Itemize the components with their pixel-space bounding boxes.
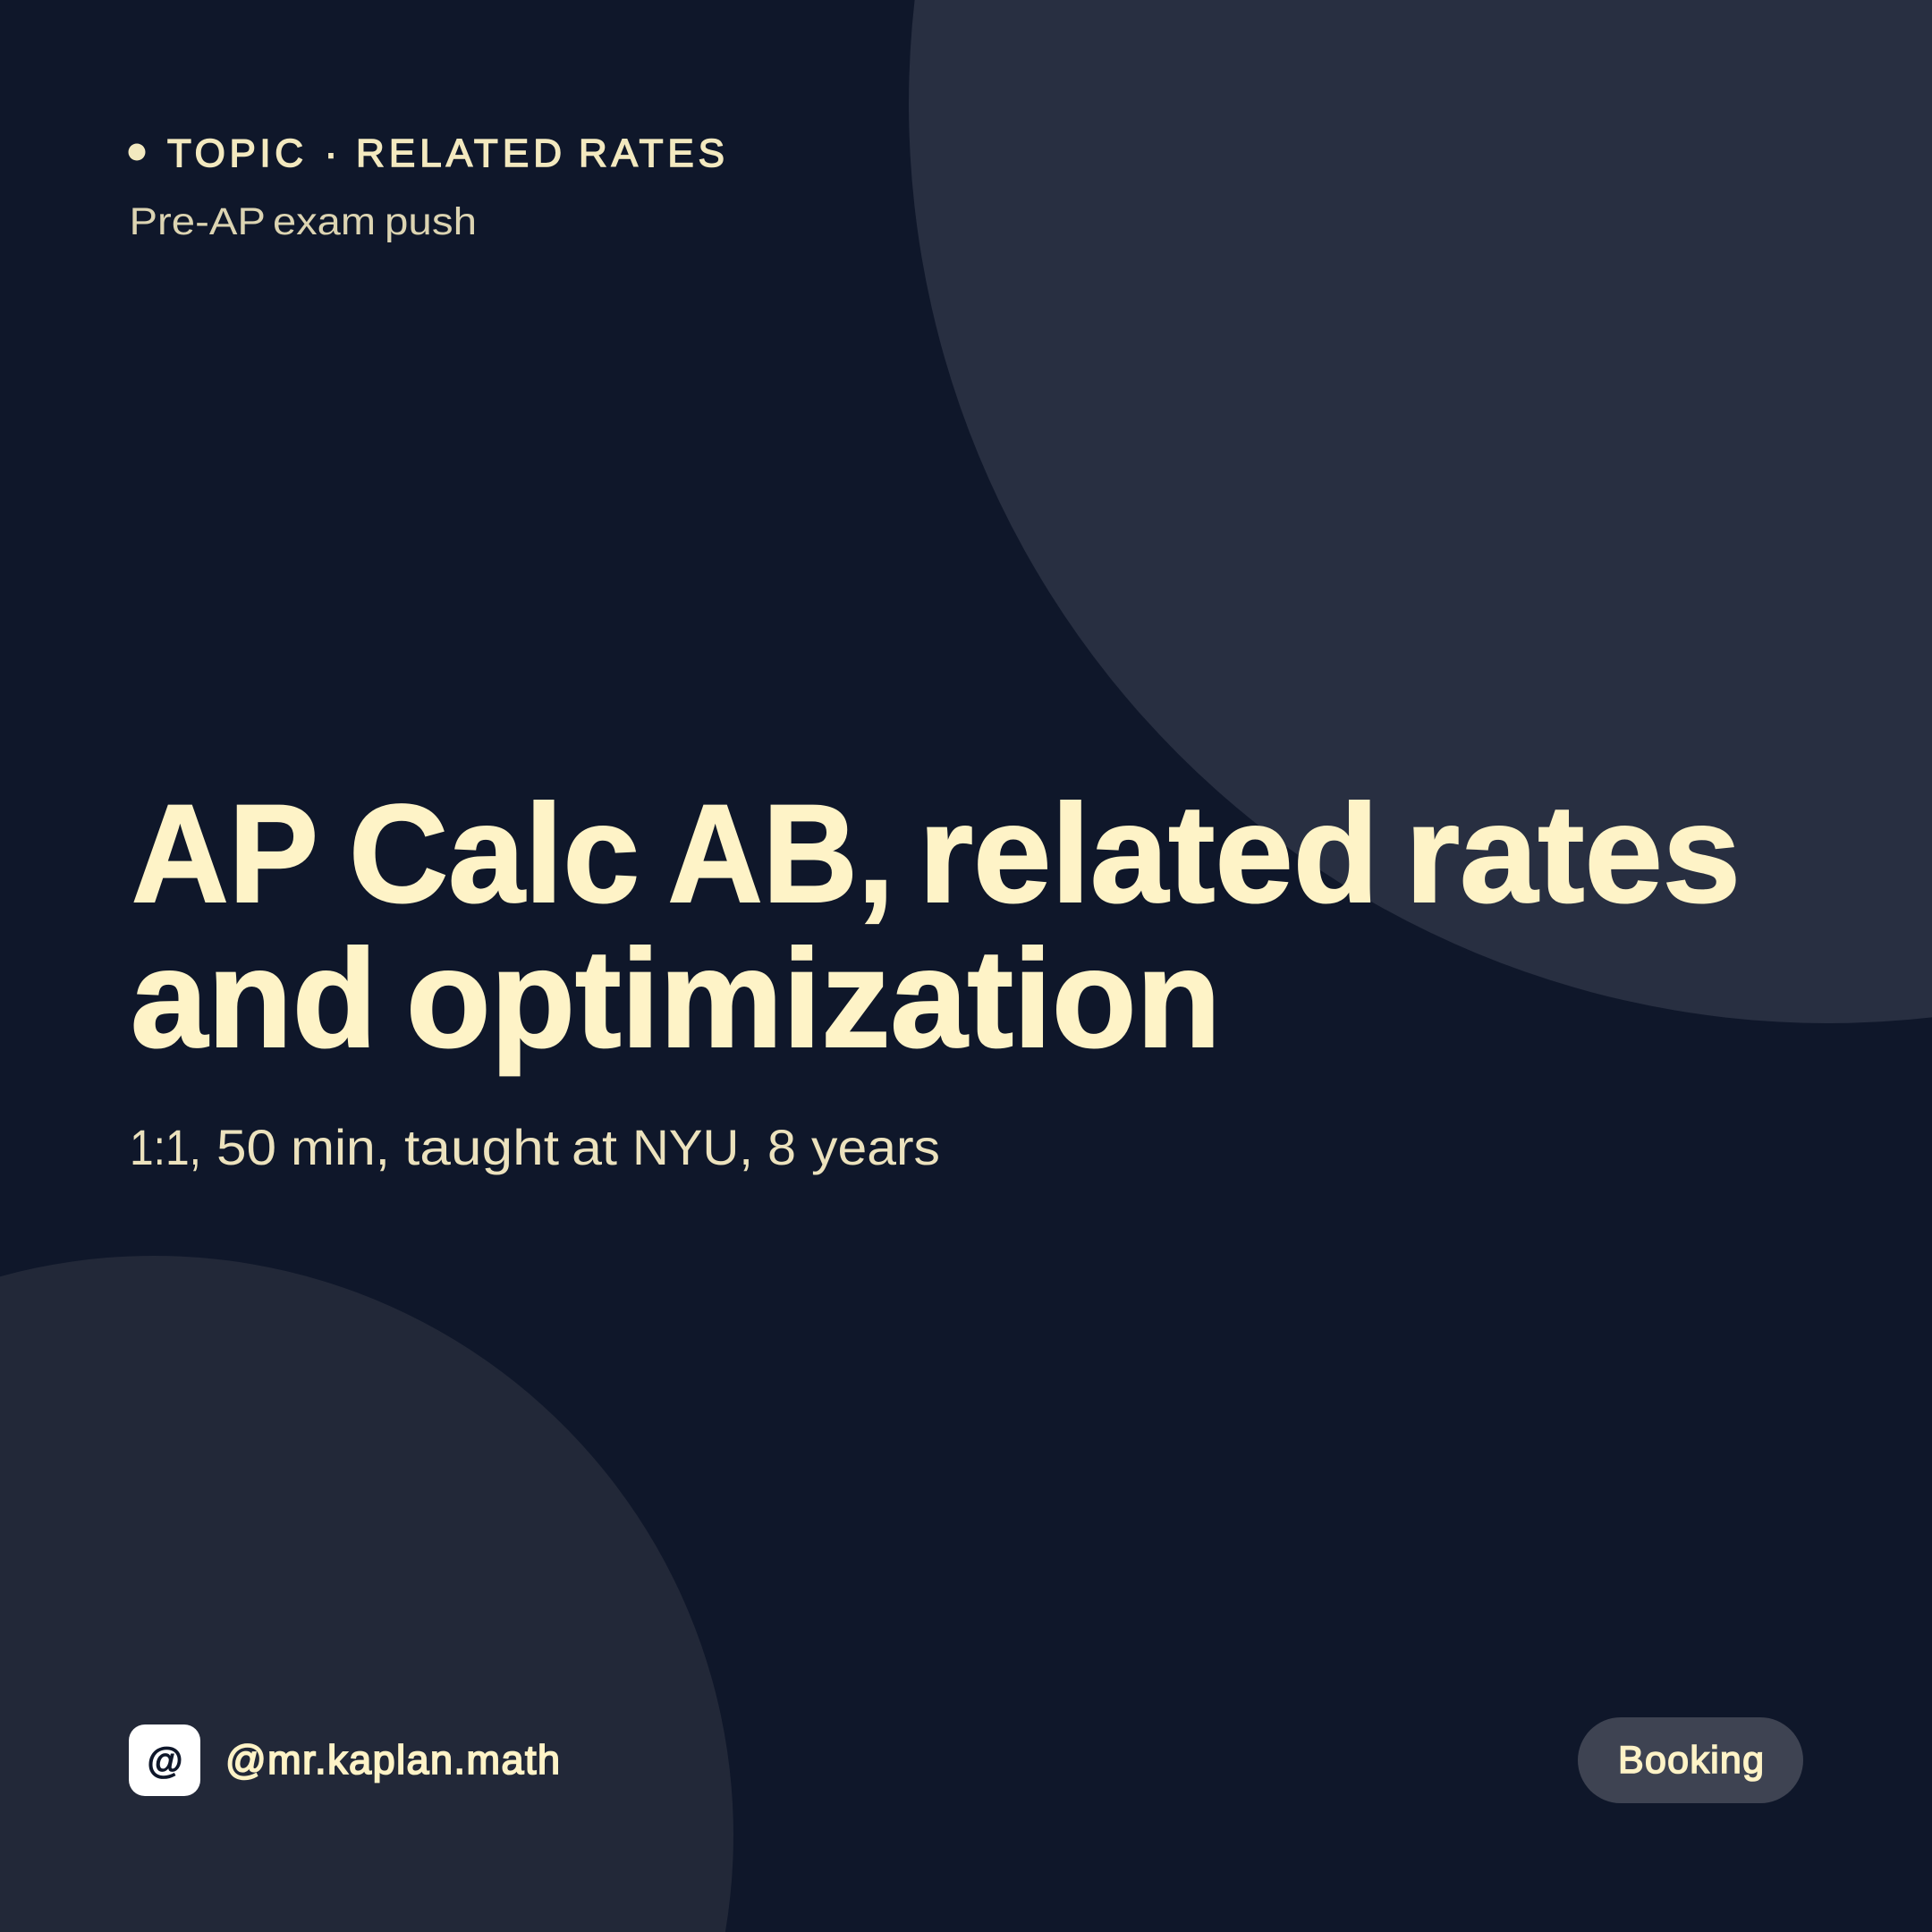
subtitle: min, <box>291 1119 390 1175</box>
eyebrow text: RELATED <box>356 131 562 175</box>
title: rates <box>1405 776 1741 932</box>
eyebrow text: TOPIC <box>167 131 303 175</box>
subtitle <box>130 1119 940 1175</box>
title <box>131 776 1741 1077</box>
secondary line: exam push: exam <box>273 200 376 243</box>
icon: at sign badge <box>129 1724 200 1796</box>
title: and <box>131 921 377 1077</box>
decorative circle: top right <box>909 0 1932 1023</box>
title: Calc <box>349 776 640 932</box>
handle text: @mr.kaplan.math <box>225 1737 560 1783</box>
icon: at sign badge: @ <box>148 1740 182 1781</box>
title: related <box>919 776 1379 932</box>
eyebrow text <box>167 131 724 175</box>
eyebrow text: RATES <box>579 131 724 175</box>
subtitle: years <box>811 1119 940 1175</box>
subtitle: 50 <box>216 1119 276 1175</box>
secondary line: exam push <box>129 200 477 243</box>
button: booking <box>1578 1717 1803 1803</box>
subtitle: 1:1, <box>130 1119 201 1175</box>
eyebrow: topic label <box>129 131 724 175</box>
title: optimization <box>406 921 1221 1077</box>
subtitle: NYU, <box>632 1119 753 1175</box>
subtitle: 8 <box>767 1119 796 1175</box>
button: booking: Booking <box>1618 1739 1764 1782</box>
subtitle: at <box>572 1119 617 1175</box>
title: AB, <box>668 776 894 932</box>
eyebrow text: · <box>325 131 337 175</box>
subtitle: taught <box>404 1119 559 1175</box>
secondary line: exam push: push <box>385 200 477 243</box>
title: AP <box>131 776 318 932</box>
handle: account badge and name <box>129 1724 560 1796</box>
icon: bullet dot <box>129 143 145 161</box>
secondary line: exam push: Pre-AP <box>129 200 266 243</box>
decorative circle: bottom left <box>0 1256 733 1932</box>
